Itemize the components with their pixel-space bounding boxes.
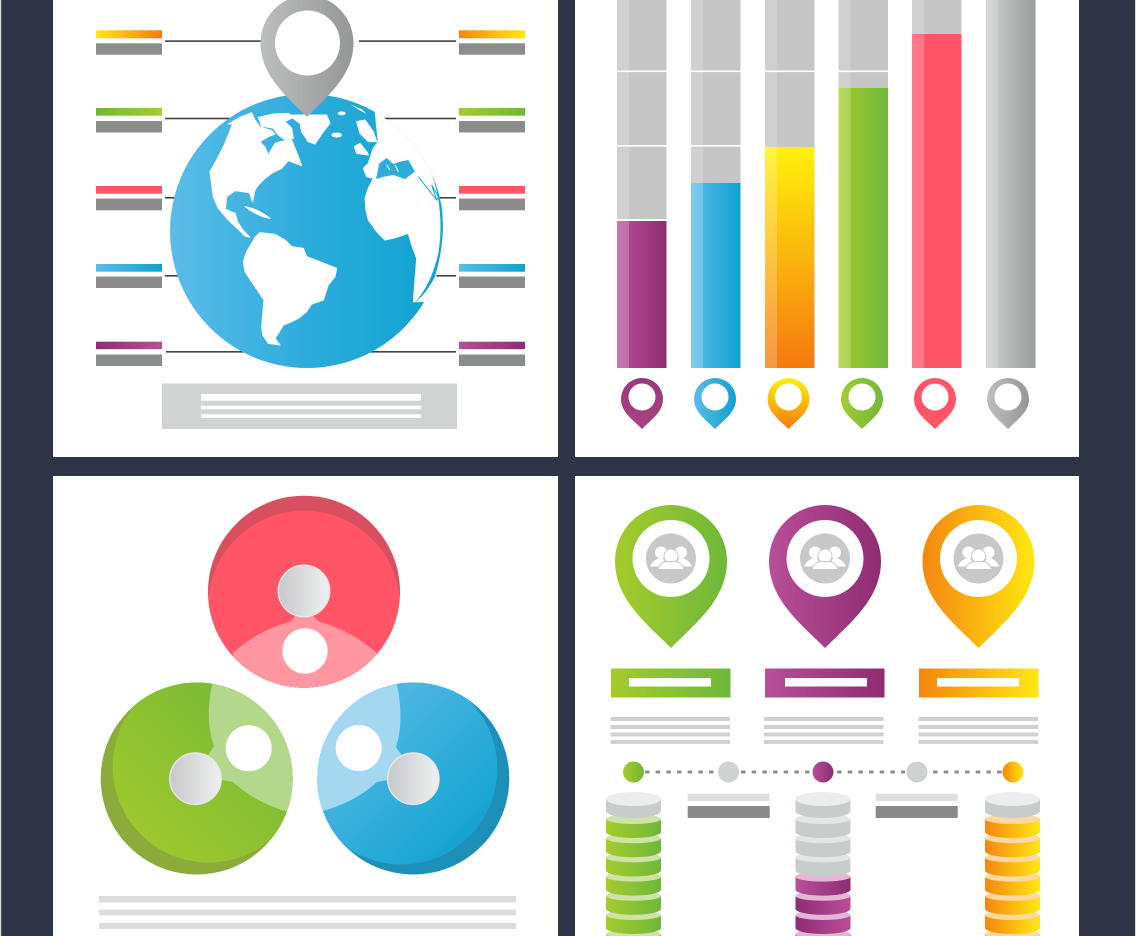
timeline <box>623 760 1024 784</box>
orange label <box>919 668 1038 698</box>
green label <box>611 668 730 698</box>
text block: caption <box>162 384 457 429</box>
text bars left <box>688 794 770 818</box>
panel: bar chart <box>575 0 1079 457</box>
icon: blue pin <box>694 378 736 429</box>
text lines: green <box>610 717 730 744</box>
red circle <box>208 496 400 703</box>
orange stack <box>985 792 1040 936</box>
bar 5 red <box>912 0 962 368</box>
bar 4 green <box>838 0 888 368</box>
left labels <box>96 30 162 366</box>
icon: purple pin <box>621 378 663 429</box>
connector lines <box>165 40 456 353</box>
purple map pin <box>769 505 881 648</box>
icon: yellow pin <box>768 378 810 429</box>
panel: pins and stacks <box>575 476 1079 936</box>
orange map pin <box>922 505 1034 648</box>
bar 2 blue <box>691 0 740 368</box>
icon: green pin <box>841 378 883 429</box>
bar 3 yellow <box>765 0 814 368</box>
text bars right <box>876 794 958 818</box>
text lines: orange <box>918 717 1038 744</box>
panel: three circles <box>53 476 558 936</box>
bar 1 purple <box>617 0 666 368</box>
green circle <box>100 682 293 874</box>
panel: globe <box>53 0 558 457</box>
green stack <box>606 792 661 936</box>
globe <box>170 93 460 368</box>
icon: grey map pin <box>261 0 353 117</box>
icon: grey pin <box>987 378 1029 429</box>
text block: bottom lines <box>99 896 516 929</box>
right labels <box>459 30 525 366</box>
bar 6 grey <box>986 0 1036 368</box>
green map pin <box>615 505 727 648</box>
blue circle <box>317 682 510 874</box>
purple label <box>765 668 884 698</box>
text lines: purple <box>764 717 884 744</box>
purple stack <box>796 792 850 936</box>
icon: red pin <box>914 378 956 429</box>
